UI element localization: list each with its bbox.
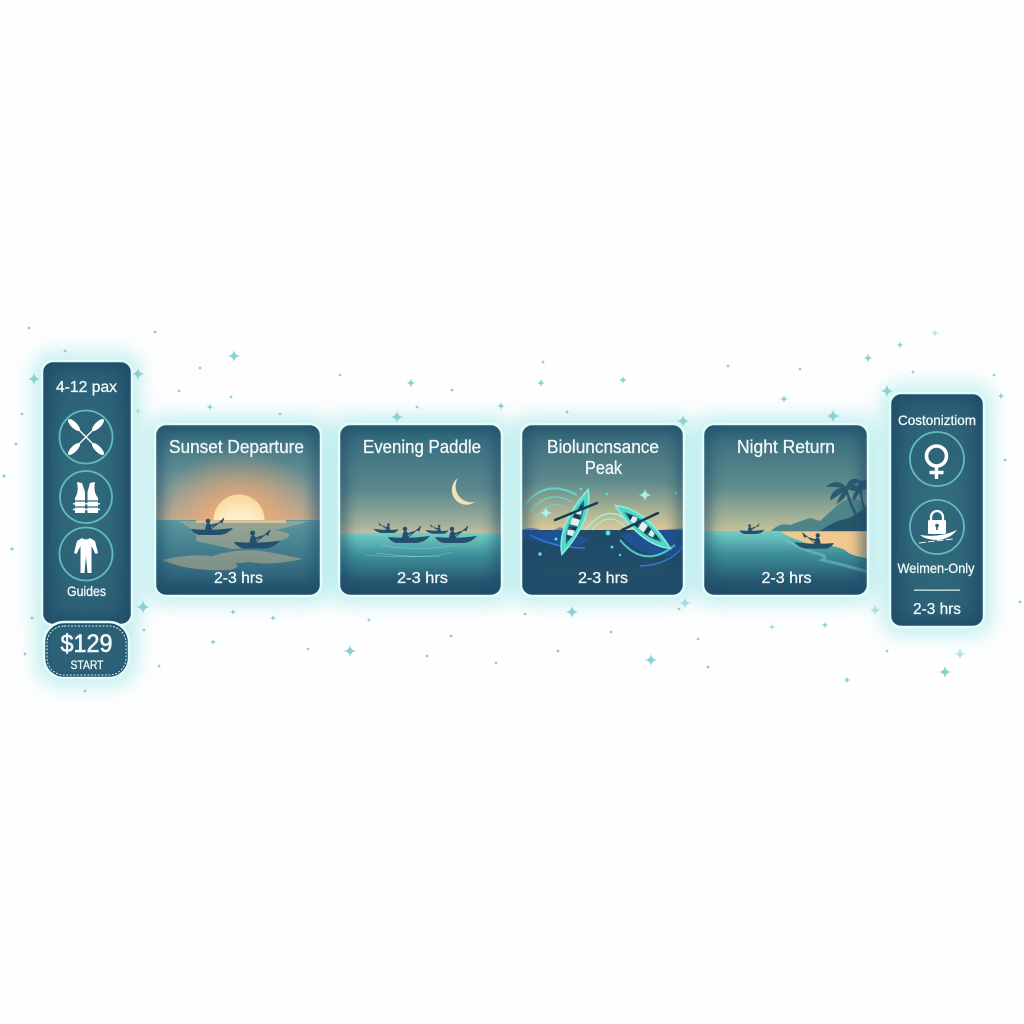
- panel: bioluminescence peak: [521, 424, 684, 596]
- duration: 2-3 hrs: [762, 570, 812, 587]
- glowing particles: [538, 488, 677, 556]
- near kayak: [794, 533, 834, 549]
- distant kayak: [739, 524, 765, 534]
- icon: crossed paddles: [60, 410, 112, 464]
- start label: START: [70, 658, 104, 672]
- duration: 2-3 hrs: [214, 570, 263, 587]
- heading: Sunset Departure: [169, 437, 304, 457]
- beach: [781, 532, 868, 558]
- panel: sunset departure: [154, 424, 324, 596]
- paddles: [555, 503, 658, 530]
- heading: Night Return: [737, 437, 835, 457]
- group size label: 4-12 pax: [56, 379, 117, 396]
- heading: Peak: [585, 458, 623, 478]
- icon: padlock on boat: [910, 500, 964, 554]
- icon: female symbol: [910, 432, 964, 486]
- kayak paddler two: [234, 530, 280, 548]
- heading: [547, 437, 659, 478]
- palm trees: [828, 480, 868, 516]
- left panel: group size and gear: [42, 361, 132, 625]
- heading: Costoniztiom: [898, 412, 976, 428]
- water ripples: [365, 545, 455, 557]
- guides label: Guides: [67, 583, 106, 599]
- sparkles: scattered stars and dots: [1, 327, 1021, 692]
- icon: crescent moon: [452, 478, 475, 505]
- kayak one: [560, 488, 590, 556]
- icon: life jacket: [60, 471, 112, 523]
- glowing swirls: [525, 488, 675, 556]
- duration: 2-3 hrs: [397, 570, 448, 587]
- sun glow: [165, 453, 312, 520]
- duration: 2-3 hrs: [578, 570, 628, 587]
- heading: Evening Paddle: [363, 437, 481, 457]
- icon: sun: [214, 494, 264, 520]
- price: $129: [60, 630, 112, 658]
- outer glow behind panels: [34, 353, 992, 686]
- divider: [914, 590, 960, 591]
- price badge: [44, 622, 129, 678]
- heading: Bioluncnsance: [547, 437, 659, 457]
- distant hills: [771, 497, 868, 531]
- water reflections: [162, 521, 310, 570]
- panel: night return: [703, 424, 868, 596]
- icon: wetsuit: [60, 528, 112, 580]
- duration: 2-3 hrs: [913, 601, 961, 618]
- women-only label: Weimen-Only: [898, 560, 974, 576]
- kayak two: [614, 504, 672, 550]
- right panel: customization: [890, 393, 984, 627]
- kayak group: [373, 523, 477, 543]
- panel: evening paddle: [339, 424, 502, 596]
- blue waves: [521, 527, 684, 556]
- kayak paddler one: [191, 518, 233, 535]
